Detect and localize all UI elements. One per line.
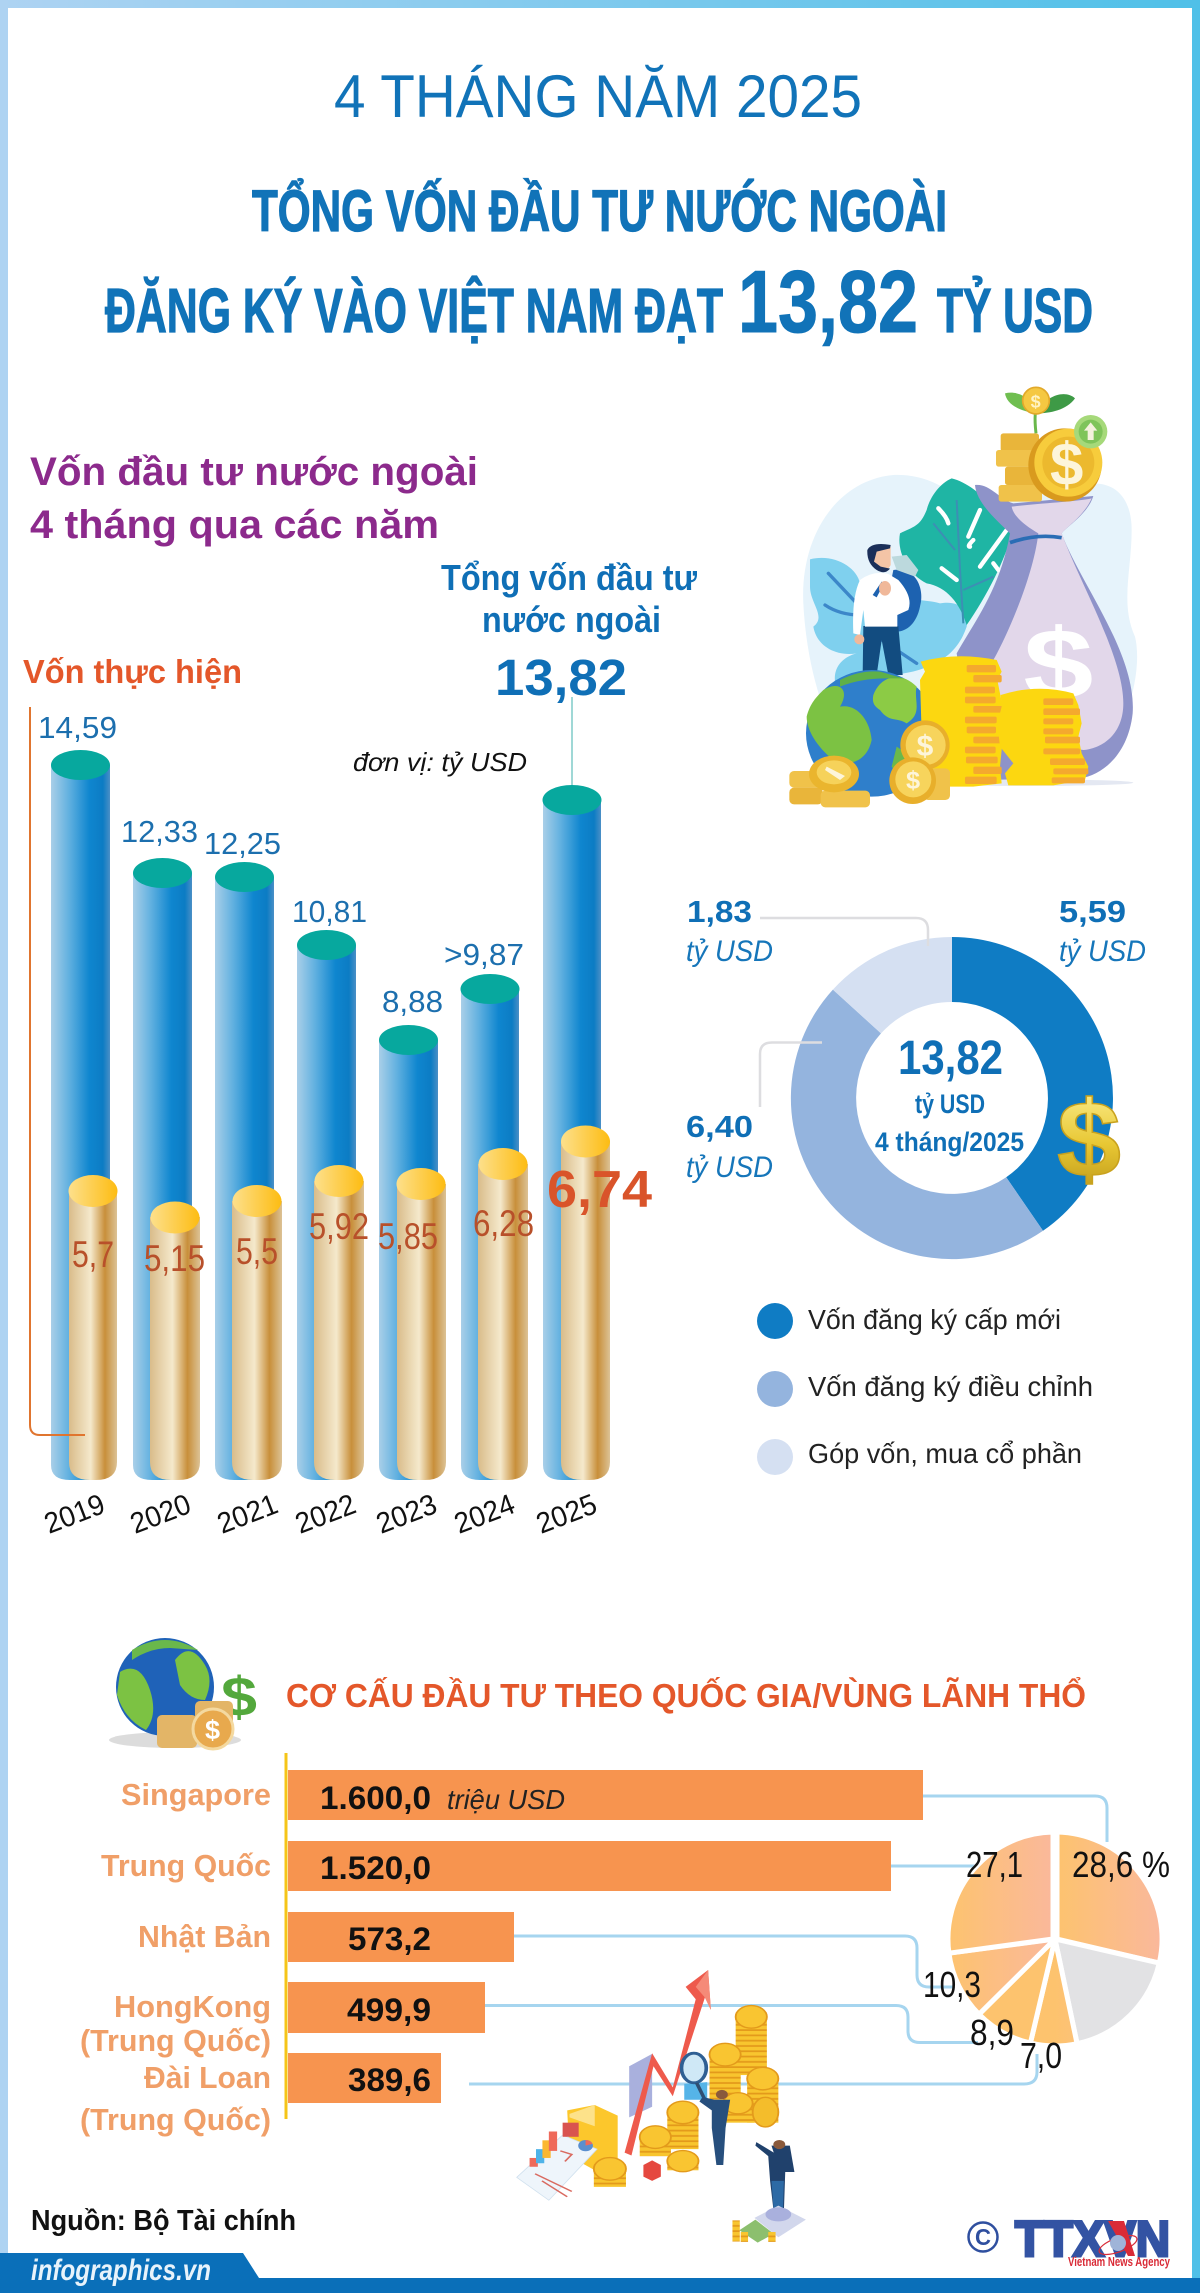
logo: TTXVN: TTXVN (1015, 2211, 1170, 2267)
coin stacks (920, 656, 1088, 787)
label 5,59: 5,59 (1059, 894, 1126, 929)
illustration: growth arrow, coins and business people (517, 1970, 806, 2243)
bar: Singapore (121, 1770, 923, 1820)
title: 4 THÁNG NĂM 2025 (334, 63, 862, 130)
donut chart (686, 894, 1146, 1259)
coin stacks (594, 2006, 778, 2187)
title: TỔNG VỐN ĐẦU TƯ NƯỚC NGOÀI (252, 179, 947, 244)
bar: Nhat Ban: Nhật Bản (138, 1919, 271, 1954)
year labels: 2022 (291, 1488, 360, 1541)
label 1,83: tỷ USD (686, 935, 773, 968)
cash and small coins (732, 2220, 776, 2243)
segment: adjusted registration (791, 990, 1043, 1259)
unit note: đơn vị: tỷ USD (353, 747, 527, 777)
total capital callout: nước ngoài (482, 599, 661, 640)
pie labels: 27,1 (966, 1844, 1023, 1885)
callout lines (760, 918, 928, 1107)
document and charts (517, 2105, 618, 2200)
top coins and sprout: $ (1050, 431, 1083, 498)
bar 2023: 5,85 (378, 1216, 438, 1257)
heading: capital over years: 4 tháng qua các năm (30, 503, 439, 547)
pie labels (923, 1844, 1170, 2076)
investor figure (853, 544, 921, 675)
segment: new registration (952, 937, 1113, 1231)
globe (806, 670, 937, 797)
label 6,40: tỷ USD (686, 1151, 773, 1184)
magnifier (682, 2053, 707, 2100)
bar: Dai Loan: Đài Loan (144, 2060, 271, 2095)
bar 2021: 5,5 (236, 1231, 278, 1272)
bar: Trung Quoc: Trung Quốc (101, 1848, 271, 1883)
label 6,40 (686, 1109, 773, 1184)
label 1,83 (686, 894, 773, 968)
total capital callout: Tổng vốn đầu tư (441, 557, 698, 598)
label 5,59: tỷ USD (1059, 935, 1146, 968)
total capital callout: 13,82 (495, 649, 627, 706)
pie labels: 28,6 % (1072, 1844, 1170, 1885)
pie labels: 10,3 (923, 1964, 981, 2005)
heading: structure by country: CƠ CẤU ĐẦU TƯ THEO QUỐC GIA/VÙNG LÃNH THỔ (286, 1676, 1086, 1714)
center value (875, 1032, 1024, 1157)
donut legend: Vốn đăng ký cấp mới (808, 1304, 1061, 1335)
bar 2023 (378, 984, 446, 1480)
bag dollar sign: $ (1023, 608, 1093, 720)
axis (284, 1753, 288, 2119)
label 6,40: 6,40 (686, 1109, 753, 1144)
top coins and sprout (996, 387, 1107, 502)
bar: Dai Loan: (Trung Quốc) (80, 2102, 271, 2137)
title: TỶ USD (937, 277, 1093, 346)
bar 2019: 14,59 (38, 710, 117, 745)
center value: 13,82 (898, 1032, 1003, 1085)
bar and zigzag arrow (625, 1970, 711, 2155)
year labels (40, 1488, 601, 1541)
bar: Nhat Ban: 573,2 (348, 1921, 431, 1957)
year labels: 2024 (450, 1488, 519, 1541)
year labels: 2020 (126, 1488, 195, 1541)
year labels: 2021 (213, 1488, 282, 1541)
loose coins: $ (917, 730, 934, 763)
pie labels: 8,9 (970, 2012, 1014, 2053)
footer site name: infographics.vn (31, 2254, 211, 2287)
bar: Nhat Ban (138, 1912, 514, 1962)
title (105, 63, 1093, 351)
person on platform (754, 2140, 806, 2237)
bar 2021 (204, 826, 282, 1480)
horizontal bar chart (80, 1753, 923, 2137)
bar: Dai Loan (80, 2053, 441, 2137)
bar 2023: 8,88 (382, 984, 443, 1019)
bar: HongKong: HongKong (114, 1989, 271, 2024)
top coins and sprout: $ (1031, 391, 1041, 411)
icon: globe with coins: $ (205, 1715, 220, 1745)
loose coins: $ (906, 766, 920, 794)
label 1,83: 1,83 (687, 894, 752, 929)
bar 2025: 6,74 (547, 1161, 652, 1219)
cylinder bar chart (30, 707, 652, 1541)
bar 2022: 5,92 (309, 1206, 369, 1247)
icon: globe with coins: $ (221, 1665, 257, 1728)
bar 2020 (121, 814, 205, 1480)
bar: HongKong: (Trung Quốc) (80, 2023, 271, 2058)
total capital callout (441, 557, 698, 787)
bar 2021: 12,25 (204, 826, 281, 861)
bar: Trung Quoc (101, 1841, 891, 1891)
bar 2024: >9,87 (444, 937, 524, 972)
heading: capital over years: Vốn đầu tư nước ngoài (30, 450, 478, 494)
bar: Singapore: Singapore (121, 1777, 271, 1812)
legend label: realised capital: Vốn thực hiện (23, 653, 242, 690)
heading: capital over years (30, 450, 478, 547)
bar: Singapore: 1.600,0 (320, 1780, 431, 1816)
pie chart (948, 1832, 1162, 2046)
center value: tỷ USD (915, 1089, 985, 1119)
bar: HongKong (80, 1982, 485, 2058)
bar 2022: 10,81 (292, 894, 367, 929)
bar 2025 (542, 785, 652, 1480)
bar: HongKong: 499,9 (347, 1992, 431, 2028)
bar 2024: 6,28 (473, 1203, 534, 1244)
connector lines (469, 1796, 1107, 2084)
title: ĐĂNG KÝ VÀO VIỆT NAM ĐẠT (105, 277, 723, 346)
donut legend: Góp vốn, mua cổ phần (808, 1438, 1082, 1469)
donut legend (757, 1303, 1093, 1475)
person with magnifier (699, 2090, 730, 2165)
bar 2020: 5,15 (144, 1238, 205, 1279)
year labels: 2019 (40, 1488, 109, 1541)
logo: TTXVN: C (975, 2224, 991, 2250)
title: 13,82 (738, 252, 918, 351)
footer band (0, 2253, 1200, 2293)
label 5,59 (1059, 894, 1146, 968)
bar 2019: 5,7 (72, 1234, 114, 1275)
bar 2020: 12,33 (121, 814, 198, 849)
bar: Singapore: triệu USD (447, 1784, 565, 1815)
bar 2019 (38, 710, 118, 1480)
pie labels: 7,0 (1020, 2035, 1062, 2076)
bar 2022 (292, 894, 369, 1480)
segment: capital contribution (833, 937, 952, 1033)
realised capital bracket (30, 707, 85, 1435)
year labels: 2023 (372, 1488, 441, 1541)
year labels: 2025 (532, 1488, 601, 1541)
illustration: money bag, globe, investor (789, 387, 1137, 807)
center value: 4 tháng/2025 (875, 1127, 1024, 1157)
bar: Dai Loan: 389,6 (348, 2062, 431, 2098)
bar 2024 (444, 937, 534, 1480)
donut legend: Vốn đăng ký điều chỉnh (808, 1371, 1093, 1402)
source: Nguồn: Bộ Tài chính (31, 2205, 296, 2237)
bar: Trung Quoc: 1.520,0 (320, 1850, 431, 1886)
icon: gold dollar: $ (1057, 1078, 1121, 1199)
loose coins (789, 720, 950, 807)
icon: globe with coins (109, 1638, 257, 1749)
